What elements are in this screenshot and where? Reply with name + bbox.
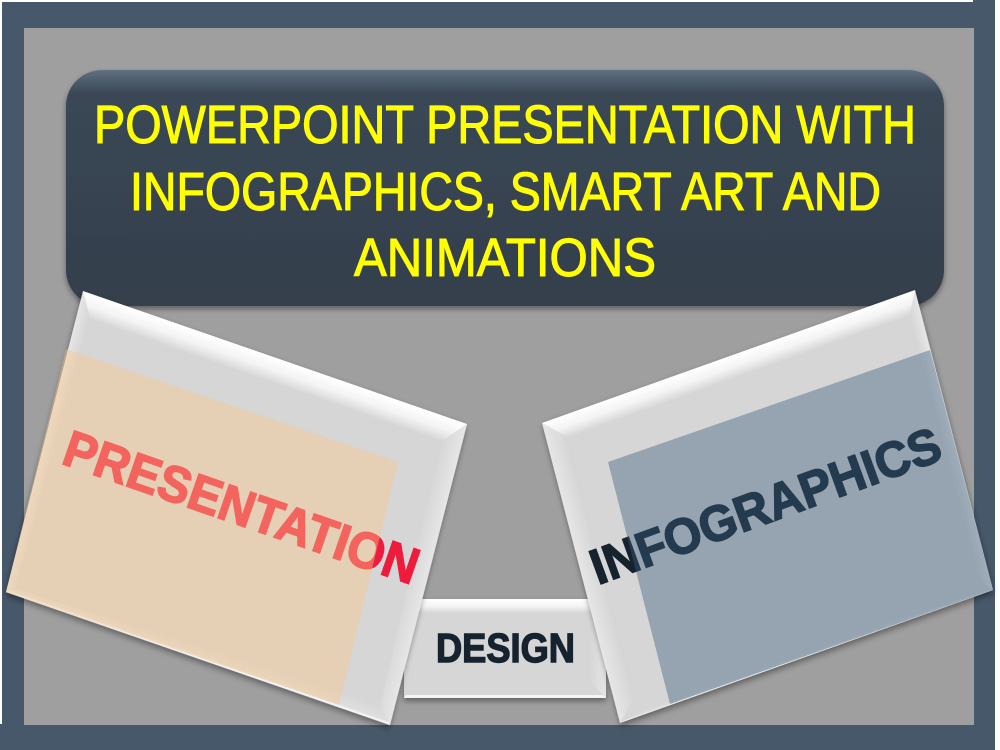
card: infographics bevel — [542, 290, 993, 723]
label: presentation: PRESENTATION — [56, 420, 427, 595]
title text: ANIMATIONS — [354, 228, 656, 288]
overlay: slate blue — [608, 350, 993, 704]
design label: DESIGN — [436, 625, 575, 671]
overlay: peach — [6, 349, 398, 705]
panel: presentation — [6, 291, 467, 725]
title banner — [66, 70, 944, 306]
design box — [404, 599, 606, 698]
panel: infographics — [542, 290, 993, 723]
card: presentation bevel — [6, 291, 467, 725]
label: infographics: INFOGRAPHICS — [583, 417, 949, 595]
title text — [94, 95, 916, 288]
title text: INFOGRAPHICS, SMART ART AND — [130, 162, 881, 222]
